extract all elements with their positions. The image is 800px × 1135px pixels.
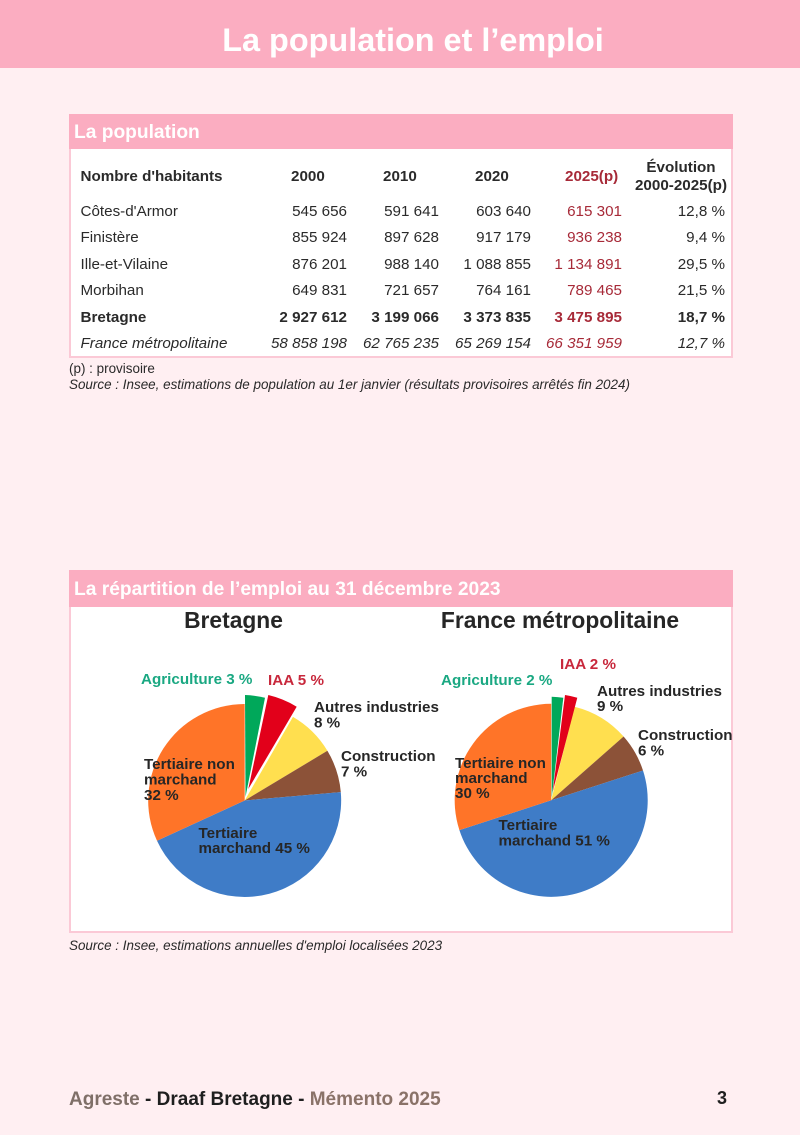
row: Ille-et-Vilaine: 29,5 % (678, 256, 725, 273)
panel: employment (69, 570, 733, 933)
row: Côtes-d'Armor: 603 640 (476, 203, 531, 220)
row: Bretagne: 3 475 895 (554, 309, 622, 326)
row: Finistère: 897 628 (384, 229, 439, 246)
label: Autres industries: Autres industries (314, 699, 439, 716)
row: Finistère: 855 924 (292, 229, 347, 246)
label: Agriculture: Agriculture 2 % (441, 672, 553, 689)
row: Bretagne: 3 373 835 (463, 309, 531, 326)
label: Tertiaire non marchand: 30 % (455, 785, 490, 802)
row: Bretagne: 2 927 612 (279, 309, 347, 326)
pie chart: France métropolitaine (441, 607, 732, 897)
label: Tertiaire non marchand: 32 % (144, 787, 179, 804)
row: France métropolitaine: 66 351 959 (546, 335, 622, 352)
label: Agriculture: Agriculture 3 % (141, 671, 253, 688)
row: Morbihan: 21,5 % (678, 282, 725, 299)
label: Tertiaire non marchand: Tertiaire non (455, 755, 546, 772)
table header row: 2025(p) (565, 168, 618, 185)
label: Tertiaire marchand: Tertiaire (198, 825, 257, 842)
label: Autres industries: Autres industries (597, 683, 722, 700)
row: Finistère (80, 229, 725, 246)
row: France métropolitaine: 12,7 % (678, 335, 725, 352)
row: Finistère: 9,4 % (686, 229, 725, 246)
row: Bretagne: 18,7 % (678, 309, 725, 326)
row: Côtes-d'Armor: 615 301 (567, 203, 622, 220)
row: France métropolitaine: 65 269 154 (455, 335, 531, 352)
label: Autres industries: 9 % (597, 698, 624, 715)
chart title: France métropolitaine: France métropolitaine (441, 607, 679, 633)
label: Tertiaire non marchand: marchand (455, 770, 528, 787)
footer: page number: 3 (717, 1088, 727, 1108)
row: Morbihan (80, 282, 725, 299)
row: Bretagne: 3 199 066 (371, 309, 439, 326)
label: Tertiaire non marchand: marchand (144, 772, 217, 788)
row: Morbihan: 649 831 (292, 282, 347, 299)
footer: publication: Agreste - Draaf Bretagne - Mémento 2025 (69, 1089, 441, 1110)
row: Bretagne (80, 309, 725, 326)
row: Morbihan: 789 465 (567, 282, 622, 299)
pie chart: Bretagne (141, 607, 439, 897)
label: Construction: 7 % (341, 764, 368, 780)
row: Côtes-d'Armor: 545 656 (292, 203, 347, 220)
row: France métropolitaine: France métropolitaine (80, 335, 227, 352)
label: Tertiaire marchand: marchand 45 % (198, 840, 310, 857)
source: employment: Source : Insee, estimations annuelles d'emploi localisées 2023 (69, 938, 442, 953)
row: Morbihan: 764 161 (476, 282, 531, 299)
heading: employment (69, 570, 733, 607)
heading: population (69, 114, 733, 149)
chart title: Bretagne: Bretagne (184, 607, 283, 633)
title: La population et l’emploi (222, 22, 604, 58)
row: France métropolitaine (80, 335, 725, 352)
table header row: 2000-2025(p) (635, 177, 727, 194)
row: Ille-et-Vilaine: 1 134 891 (554, 256, 622, 273)
table header row: Nombre d'habitants (80, 168, 222, 185)
slices: Bretagne (148, 695, 341, 897)
heading: employment: La répartition de l’emploi au 31 décembre 2023 (74, 579, 501, 600)
row: Finistère: 936 238 (567, 229, 622, 246)
label: Construction: Construction (638, 727, 732, 744)
panel: population (69, 114, 733, 358)
label: Tertiaire marchand: marchand 51 % (498, 832, 610, 850)
table: population figures (80, 158, 727, 352)
row: Ille-et-Vilaine: 1 088 855 (463, 256, 531, 273)
label: Construction: Construction (341, 748, 436, 765)
row: Bretagne: Bretagne (80, 309, 146, 326)
heading: population: La population (74, 122, 200, 143)
row: Côtes-d'Armor (80, 203, 725, 220)
row: Finistère: 917 179 (476, 229, 531, 246)
table header row: Évolution (646, 159, 716, 176)
row: Ille-et-Vilaine: Ille-et-Vilaine (80, 256, 168, 273)
row: Morbihan: Morbihan (80, 282, 144, 299)
source: population: Source : Insee, estimations de population au 1er janvier (résultats provisoires arrêtés fin 2024) (69, 377, 630, 392)
table header row: 2010 (383, 168, 417, 185)
row: Côtes-d'Armor: 591 641 (384, 203, 439, 220)
label: Autres industries: 8 % (314, 714, 341, 732)
row: France métropolitaine: 62 765 235 (363, 335, 439, 352)
row: France métropolitaine: 58 858 198 (271, 335, 347, 352)
row: Côtes-d'Armor: 12,8 % (678, 203, 725, 220)
table header row (80, 158, 727, 194)
table header row: 2000 (291, 168, 325, 185)
row: Finistère: Finistère (80, 229, 139, 246)
label: Tertiaire non marchand: Tertiaire non (144, 756, 235, 773)
slices: France (455, 695, 648, 897)
row: Ille-et-Vilaine (80, 256, 725, 273)
label: Construction: 6 % (638, 742, 665, 760)
label: Tertiaire marchand: Tertiaire (498, 817, 557, 834)
row: Morbihan: 721 657 (384, 282, 439, 299)
row: Côtes-d'Armor: Côtes-d'Armor (80, 203, 178, 220)
note: provisoire: (p) : provisoire (69, 361, 155, 376)
label: IAA: IAA 2 % (560, 656, 616, 673)
row: Ille-et-Vilaine: 988 140 (384, 256, 439, 273)
row: Ille-et-Vilaine: 876 201 (292, 256, 347, 273)
table header row: 2020 (475, 168, 509, 185)
label: IAA: IAA 5 % (268, 672, 324, 689)
header band (0, 0, 800, 68)
